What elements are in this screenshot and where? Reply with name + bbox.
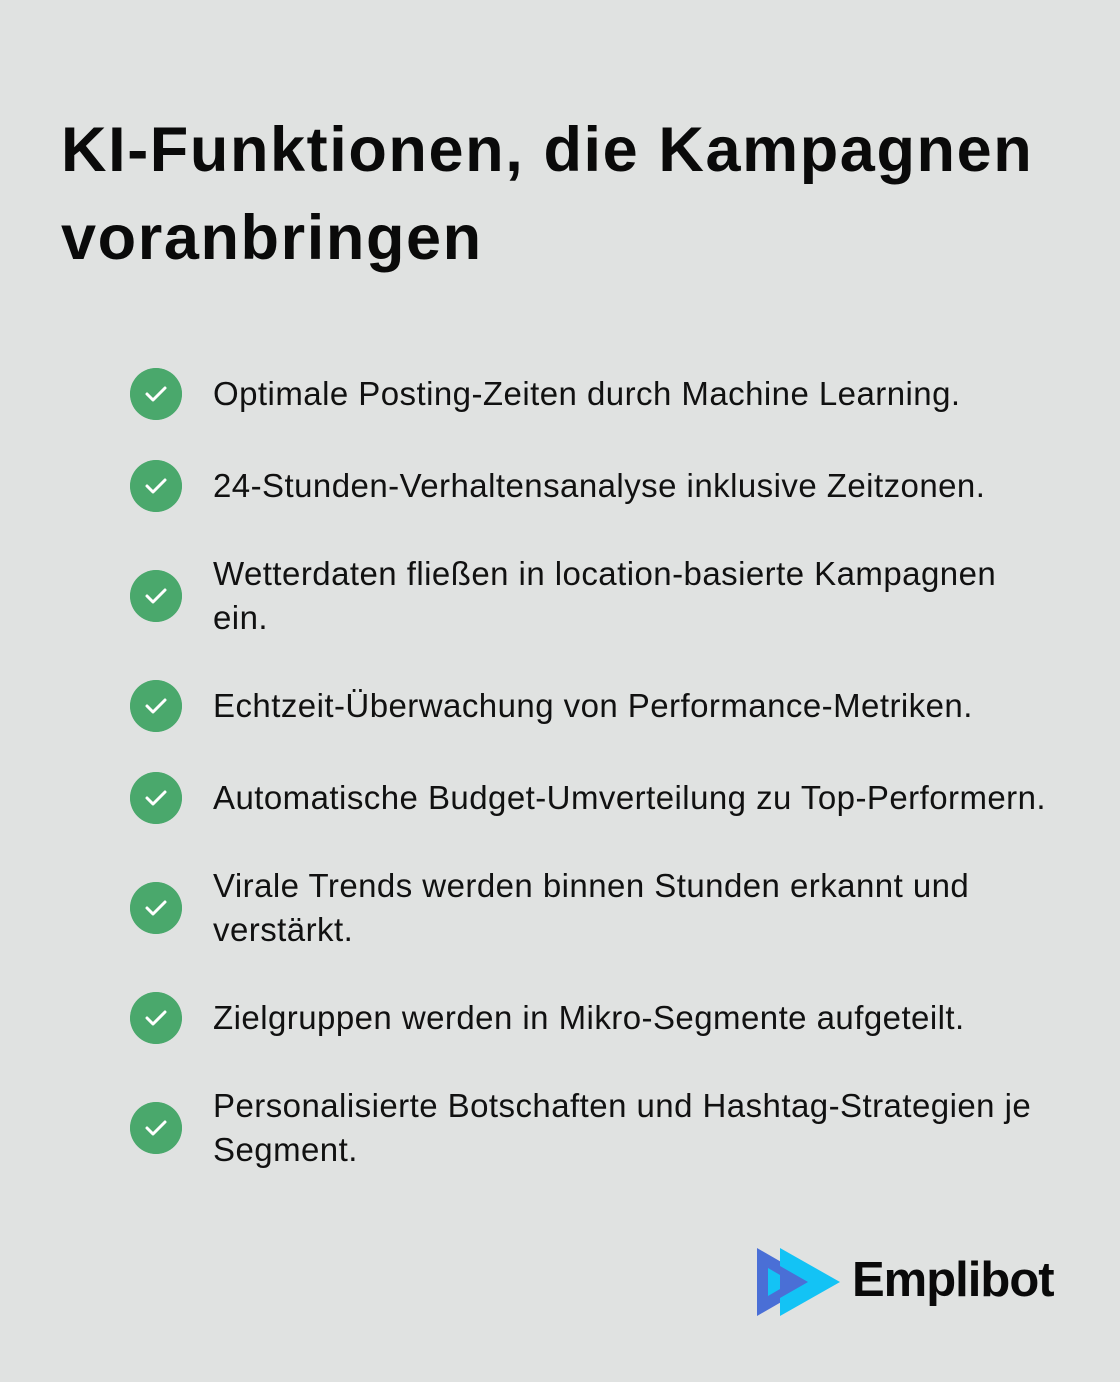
item 8: Segment. [213, 1131, 358, 1168]
item 1: Optimale Posting-Zeiten durch Machine Learning. [213, 375, 961, 412]
logo [757, 1248, 1054, 1316]
icon: check [130, 368, 182, 420]
item 6: verstärkt. [213, 911, 353, 948]
item 3 [130, 555, 996, 636]
title: voranbringen [61, 203, 483, 273]
item 3: Wetterdaten fließen in location-basierte Kampagnen [213, 555, 996, 592]
item 4: Echtzeit-Überwachung von Performance-Metriken. [213, 687, 973, 724]
icon: check [130, 772, 182, 824]
icon: check [130, 882, 182, 934]
item 8: Personalisierte Botschaften und Hashtag-Strategien je [213, 1087, 1031, 1124]
icon: check [130, 680, 182, 732]
item 4 [130, 680, 973, 732]
item 5 [130, 772, 1046, 824]
icon: logo triangles [757, 1248, 840, 1316]
icon: check [130, 1102, 182, 1154]
icon: check [130, 992, 182, 1044]
title: KI-Funktionen, die Kampagnen [61, 115, 1033, 185]
title [61, 115, 1033, 273]
icon: check [130, 570, 182, 622]
item 6: Virale Trends werden binnen Stunden erkannt und [213, 867, 969, 904]
item 2: 24-Stunden-Verhaltensanalyse inklusive Zeitzonen. [213, 467, 985, 504]
item 2 [130, 460, 985, 512]
item 6 [130, 867, 969, 948]
item 5: Automatische Budget-Umverteilung zu Top-Performern. [213, 779, 1046, 816]
item 1 [130, 368, 961, 420]
item 3: ein. [213, 599, 268, 636]
item 7: Zielgruppen werden in Mikro-Segmente aufgeteilt. [213, 999, 965, 1036]
item 8 [130, 1087, 1031, 1168]
item 7 [130, 992, 965, 1044]
icon: check [130, 460, 182, 512]
logo text: Emplibot [852, 1253, 1054, 1307]
